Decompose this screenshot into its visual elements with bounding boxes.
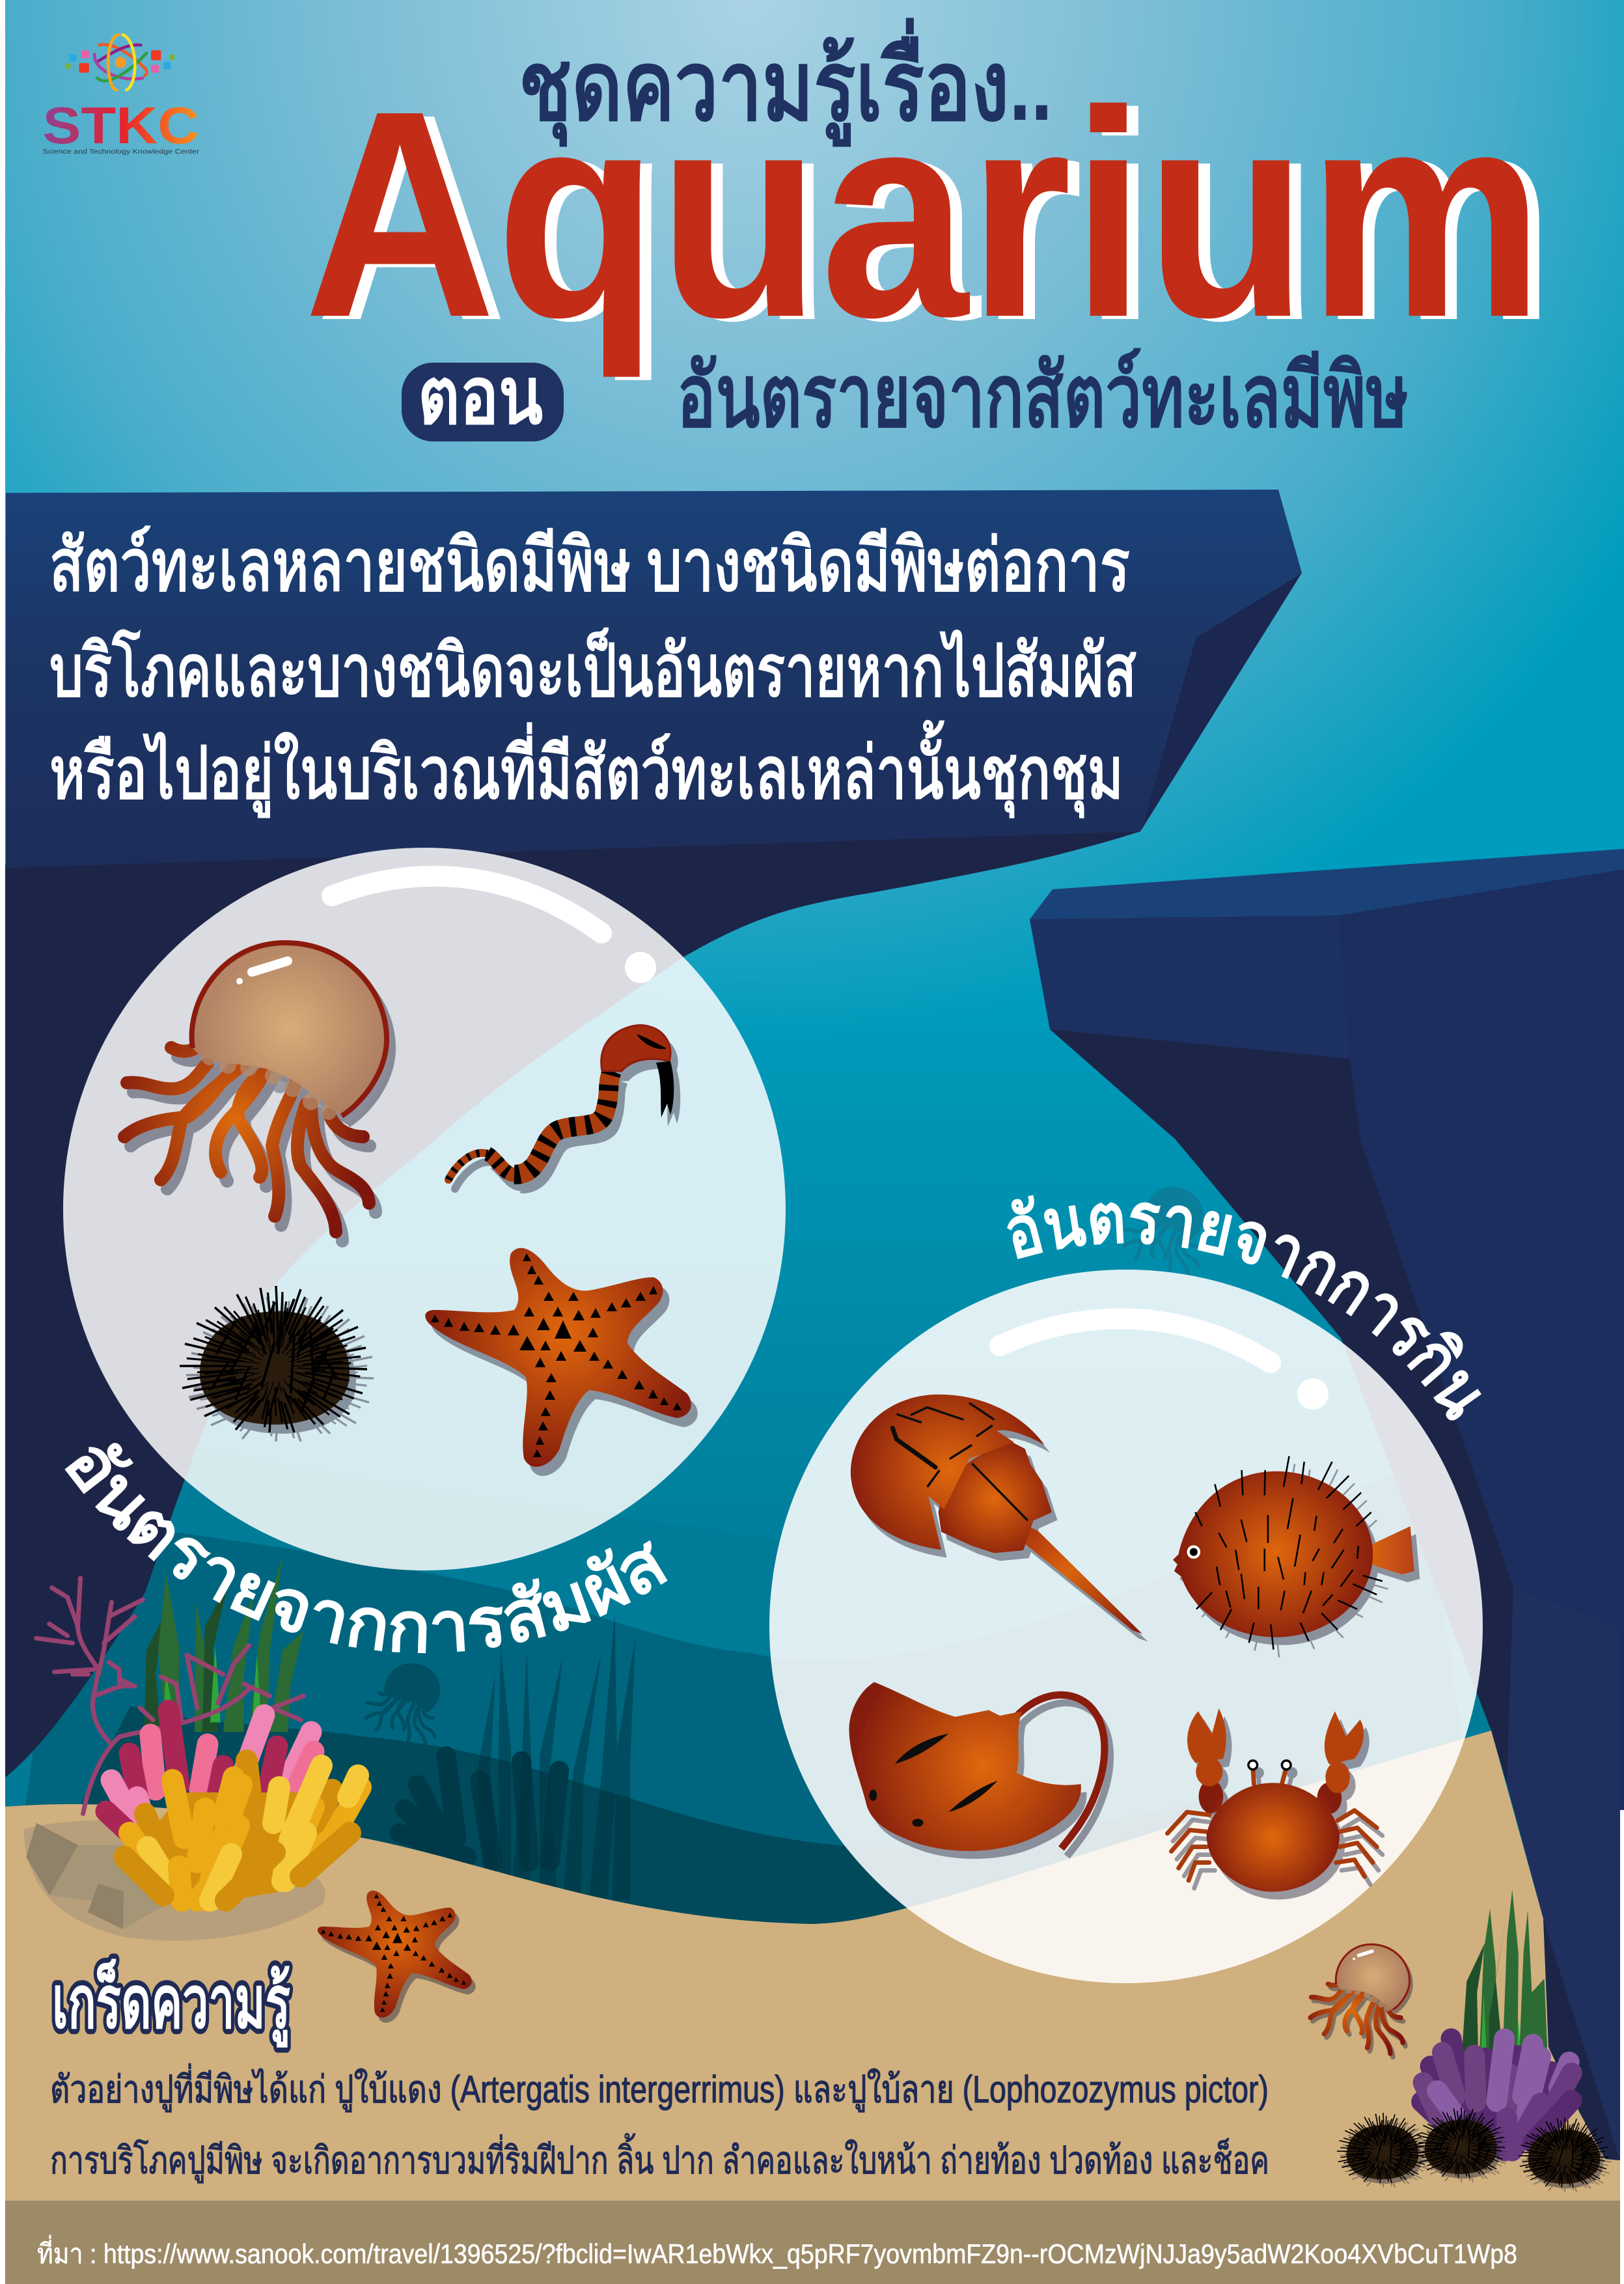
sea urchin <box>180 1284 367 1435</box>
bubble highlight <box>1000 1318 1271 1363</box>
pink coral <box>106 1710 314 1838</box>
cliff lower panel <box>1507 1588 1620 2160</box>
banner dark side <box>1140 573 1302 831</box>
logo: STKC <box>42 35 200 156</box>
starfish <box>425 1248 691 1467</box>
panel: contact hazards bubble <box>63 848 786 1570</box>
right seaweed <box>1461 1889 1548 2074</box>
trivia body: ตัวอย่างปูที่มีพิษได้แก่ ปูใบ้แดง (Artergatis intergerrimus) และปูใบ้ลาย (Lophozozymus pictor) <box>50 2063 1269 2112</box>
cliff main <box>1030 849 1624 2160</box>
horseshoe crab <box>851 1395 1142 1634</box>
cliff shaded underside <box>1050 1029 1513 1784</box>
banner text: บริโภคและบางชนิดจะเป็นอันตรายหากไปสัมผัส <box>49 628 1136 712</box>
silhouette: background jellyfish <box>366 1664 439 1745</box>
logo tagline: Science and Technology Knowledge Center <box>42 148 200 156</box>
bubble glint <box>625 952 656 983</box>
bubble highlight <box>332 876 601 933</box>
rocks <box>26 1823 124 1901</box>
yellow coral <box>124 1761 361 1901</box>
banner text: สัตว์ทะเลหลายชนิดมีพิษ บางชนิดมีพิษต่อการ <box>49 525 1130 606</box>
silhouette: background seaweed <box>477 1612 635 1901</box>
bubble disc <box>769 1270 1483 1983</box>
stingray <box>849 1682 1105 1851</box>
reef sand shadow <box>23 1820 325 1941</box>
bubble disc <box>63 848 786 1570</box>
shaded rock sliver <box>1543 1919 1620 2160</box>
cliff top face <box>1030 849 1624 919</box>
title: series heading: ชุดความรู้เรื่อง.. <box>519 18 1053 147</box>
episode pill: ตอน <box>418 352 543 440</box>
pufferfish <box>1173 1456 1414 1650</box>
reef seaweed <box>145 1554 303 1732</box>
curved label: ingestion hazards: อันตรายจากการกิน <box>1007 1195 1481 1421</box>
left reef cluster <box>23 1554 361 1941</box>
pink branching coral <box>36 1578 303 1814</box>
sand seabed <box>5 1731 1620 2284</box>
jellyfish <box>124 943 387 1232</box>
silhouette: faint jellyfish on rock <box>1124 1188 1203 1275</box>
curved label: contact hazards: อันตรายจากการสัมผัส <box>64 1443 668 1654</box>
right rock cliff <box>1030 849 1624 2160</box>
bubble glint <box>1297 1378 1328 1410</box>
banner text <box>49 525 1136 818</box>
trivia body: การบริโภคปูมีพิษ จะเกิดอาการบวมที่ริมฝีปาก ลิ้น ปาก ลำคอและใบหน้า ถ่ายท้อง ปวดท้อง และช็อค <box>50 2134 1269 2183</box>
logo wordmark: STKC <box>42 96 199 154</box>
trivia body <box>50 2063 1269 2183</box>
banner text: หรือไปอยู่ในบริเวณที่มีสัตว์ทะเลเหล่านั้นชุกชุม <box>49 721 1123 818</box>
panel: ingestion hazards bubble <box>769 1270 1483 1983</box>
purple coral <box>1422 2039 1572 2151</box>
logo squares <box>66 50 174 73</box>
footer band <box>5 2201 1620 2284</box>
small starfish <box>318 1891 472 2018</box>
sea snake <box>448 1025 674 1180</box>
logo atom mark <box>94 35 147 90</box>
top banner panel <box>6 490 1302 868</box>
left dark rock shape <box>5 828 1140 1777</box>
silhouette: background coral <box>400 1756 559 1862</box>
small jellyfish <box>1310 1944 1410 2054</box>
trivia heading: เกร็ดความรู้ <box>52 1958 290 2048</box>
sea urchin group <box>1337 2107 1608 2189</box>
right reef cluster <box>1310 1889 1608 2189</box>
banner front <box>6 490 1302 868</box>
crab <box>1168 1708 1377 1891</box>
cliff front face <box>1030 915 1350 1059</box>
